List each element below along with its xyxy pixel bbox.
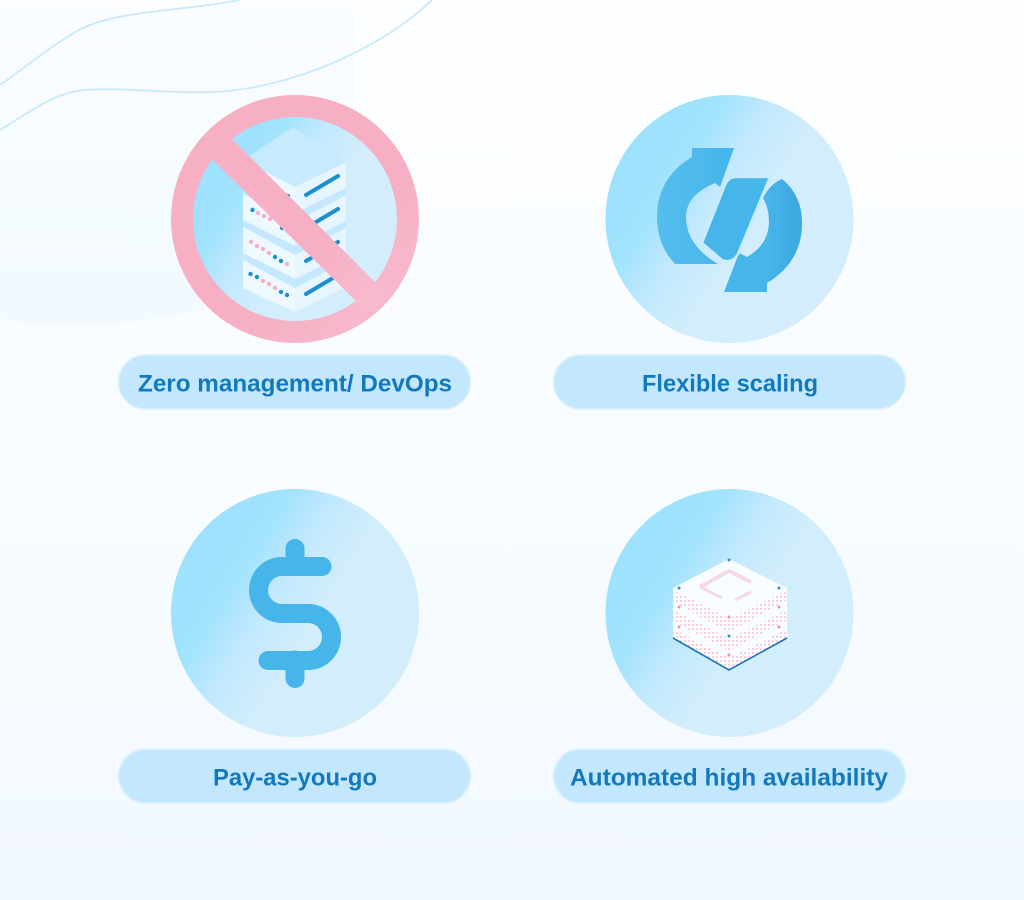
background wave lines xyxy=(0,0,432,130)
label pill: automated high availability: Automated high availability xyxy=(570,764,889,792)
label pill: pay-as-you-go xyxy=(118,749,470,803)
panel: flexible scaling xyxy=(554,95,906,409)
label pill: flexible scaling xyxy=(554,355,906,409)
icon: layered stack xyxy=(606,489,854,737)
panel: pay-as-you-go xyxy=(118,489,470,803)
icon: dollar sign xyxy=(171,489,419,737)
icon: rotating arrows xyxy=(606,95,854,343)
label pill: zero management: Zero management/ DevOps xyxy=(138,370,452,398)
label pill: automated high availability xyxy=(554,749,906,803)
panel: automated high availability xyxy=(554,489,906,803)
icon: crossed-out server xyxy=(171,95,419,343)
label pill: zero management xyxy=(118,355,470,409)
label pill: flexible scaling: Flexible scaling xyxy=(642,370,818,398)
panel: zero management xyxy=(118,95,470,409)
label pill: pay-as-you-go: Pay-as-you-go xyxy=(213,764,377,792)
background blob xyxy=(0,0,355,325)
